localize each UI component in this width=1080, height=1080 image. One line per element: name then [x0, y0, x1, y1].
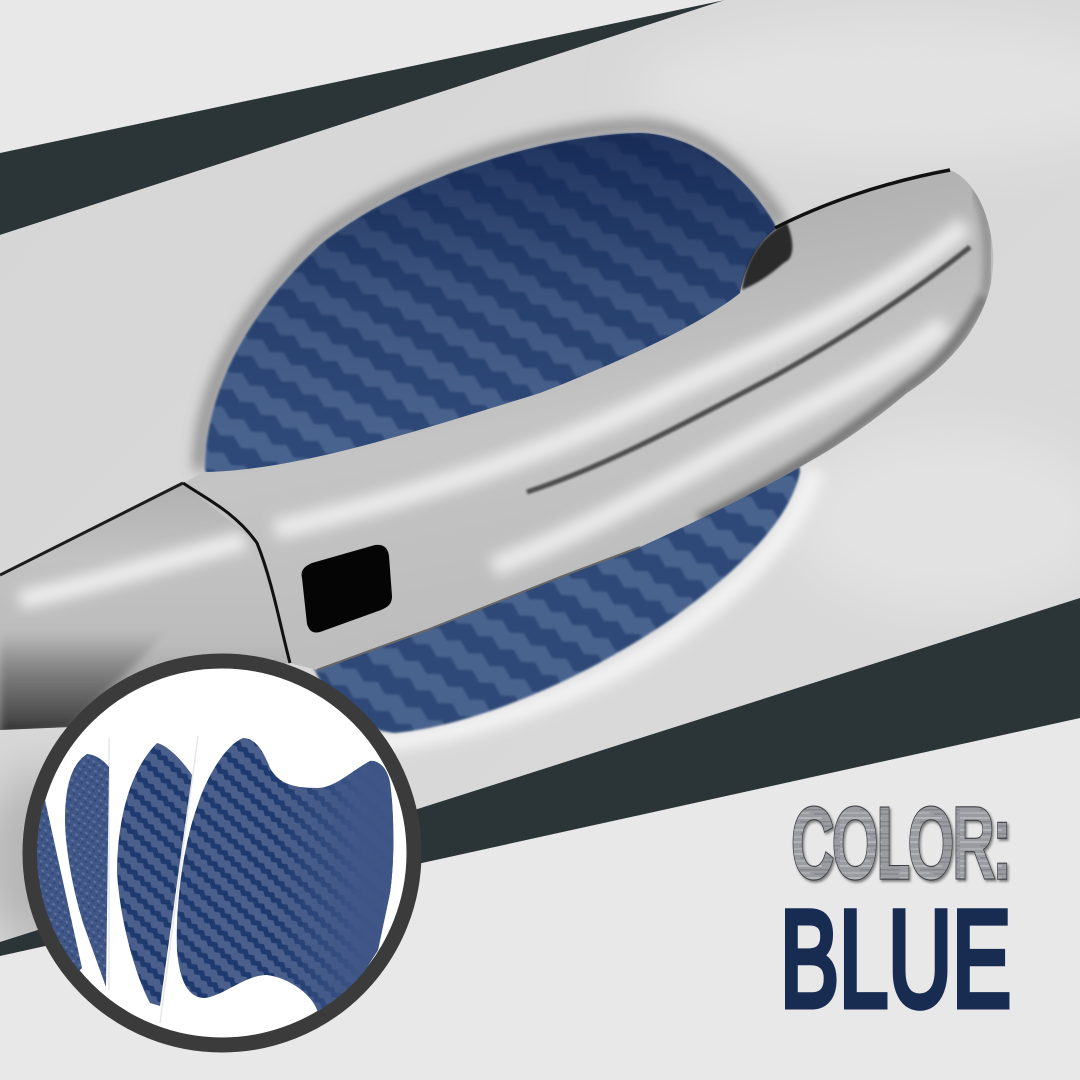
- sticker sheets: [109, 736, 198, 1023]
- key slot: [302, 545, 392, 633]
- handle base: [0, 483, 290, 735]
- inset circle: [20, 661, 414, 1045]
- sticker rim shadow: [200, 126, 782, 470]
- second sticker: [117, 743, 192, 1006]
- main sticker: [177, 738, 393, 1025]
- lower dark band: [0, 598, 1080, 956]
- door handle: [183, 170, 993, 670]
- blue carbon sticker on door: [205, 133, 800, 733]
- far left sticker: [37, 800, 82, 971]
- top dark band: [0, 0, 725, 235]
- third sticker: [65, 754, 109, 987]
